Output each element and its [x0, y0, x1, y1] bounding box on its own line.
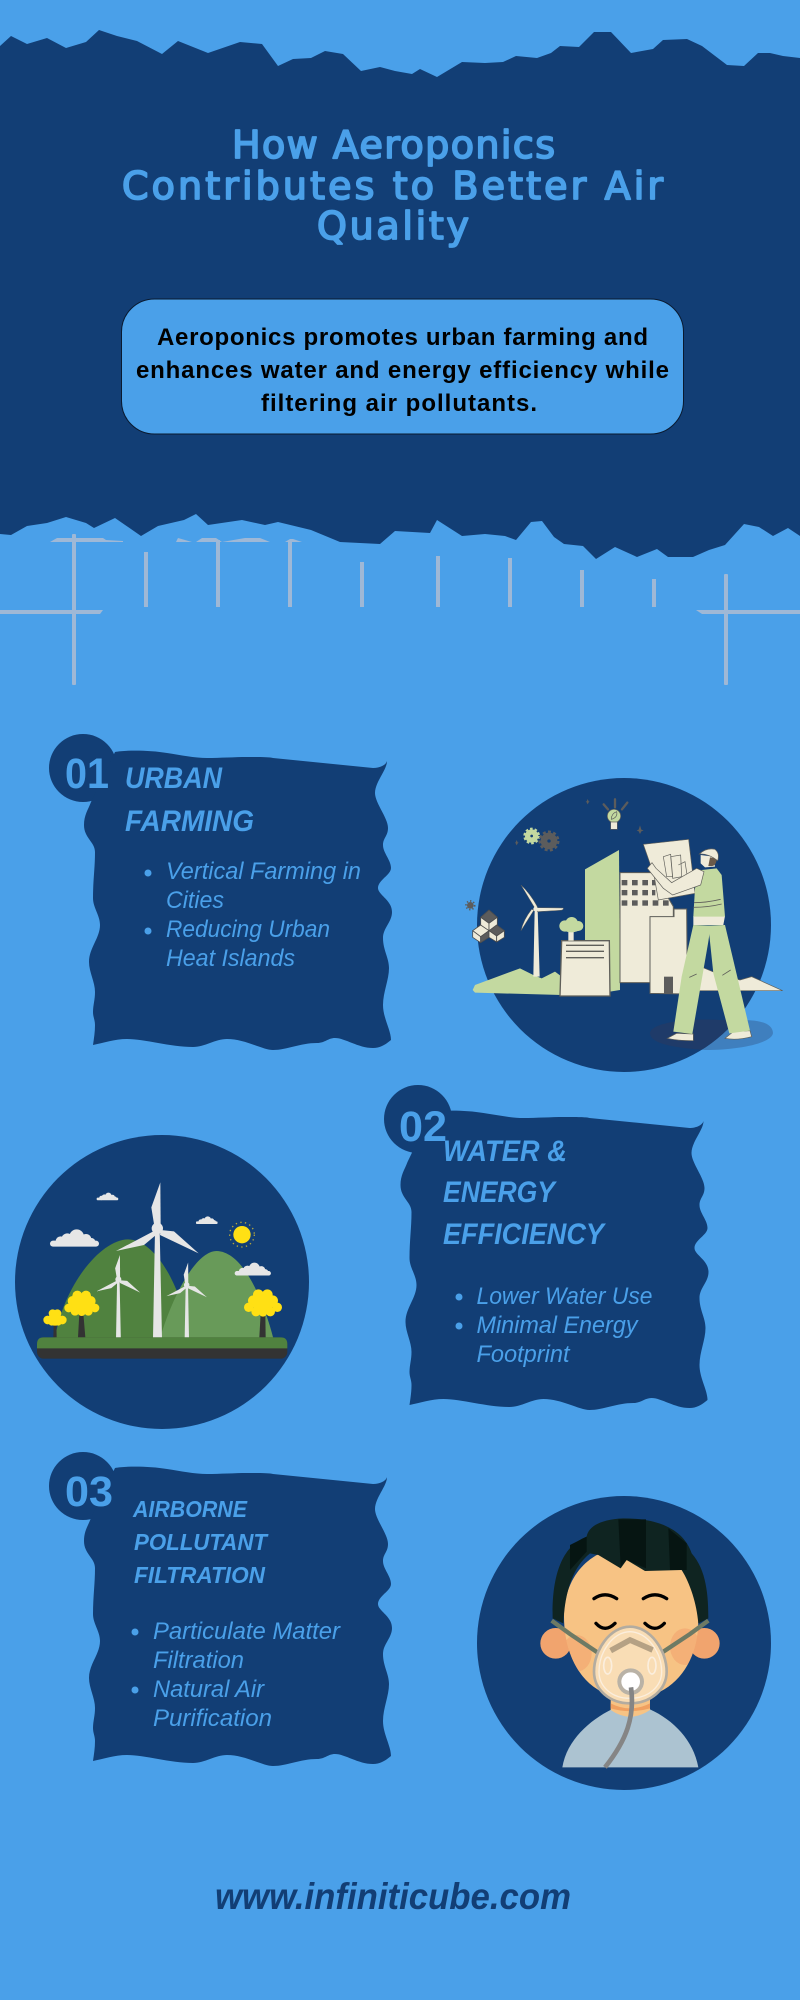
ground platform [37, 1337, 287, 1359]
arm [647, 863, 704, 895]
heading: airborne pollutant filtration: FILTRATION [134, 1562, 266, 1588]
heading: urban farming: URBAN [125, 762, 223, 795]
cubes [473, 910, 504, 943]
shirt [562, 1709, 698, 1767]
big turbine [116, 1182, 199, 1338]
intro callout: filtering air pollutants. [261, 390, 537, 417]
hair [553, 1518, 708, 1623]
list: urban farming points [144, 858, 361, 972]
sparkles [515, 799, 644, 845]
illustration: urban planner with city [466, 778, 783, 1072]
heading: urban farming: FARMING [125, 805, 254, 838]
straps [552, 1621, 708, 1656]
waist [693, 916, 725, 925]
shoes [667, 1031, 752, 1041]
head [701, 855, 715, 867]
intro callout: enhances water and energy efficiency while [136, 357, 669, 384]
list: water and energy points [456, 1283, 652, 1368]
number 02: 02 [399, 1103, 447, 1151]
title [122, 123, 663, 248]
turbine [533, 910, 540, 977]
tall green building [585, 850, 620, 992]
small turbine left [96, 1255, 140, 1338]
heading: water and energy efficiency: WATER & [443, 1135, 567, 1168]
list: filtration points: Particulate Matter [153, 1618, 341, 1645]
sun [233, 1226, 251, 1243]
list: urban farming points: Vertical Farming in [166, 858, 361, 885]
header band [0, 30, 800, 559]
illustration: wind turbines on green hills [15, 1135, 309, 1429]
list: filtration points [132, 1618, 341, 1732]
tree [568, 931, 574, 941]
plan sheet [643, 839, 695, 900]
list: filtration points: Filtration [153, 1647, 244, 1674]
list: water and energy points: Lower Water Use [476, 1283, 652, 1310]
title: Contributes to Better Air [122, 164, 663, 208]
ears [540, 1628, 571, 1659]
mask [594, 1627, 667, 1703]
tube [605, 1687, 632, 1767]
small turbine right [166, 1262, 207, 1297]
front building [650, 909, 687, 994]
grid marks below header [0, 534, 800, 685]
bulb [607, 809, 621, 823]
heading: urban farming [125, 762, 254, 838]
list: filtration points: Purification [153, 1705, 272, 1732]
title: Quality [317, 204, 469, 248]
trees [53, 1313, 266, 1337]
illustration: person with oxygen mask [477, 1496, 771, 1790]
cheeks [562, 1628, 700, 1672]
title: How Aeroponics [232, 123, 555, 167]
list: urban farming points: Cities [166, 887, 224, 914]
panel: urban farming [49, 734, 392, 1050]
windows [622, 880, 669, 906]
list: filtration points: Natural Air [153, 1676, 265, 1703]
list: water and energy points: Minimal Energy [476, 1312, 639, 1339]
intro callout: Aeroponics promotes urban farming and [157, 324, 648, 351]
list: water and energy points: Footprint [476, 1341, 571, 1368]
torso [693, 868, 725, 917]
heading: airborne pollutant filtration: POLLUTANT [134, 1529, 269, 1555]
face [564, 1547, 698, 1698]
heading: water and energy efficiency: ENERGY [443, 1176, 558, 1209]
clouds [50, 1193, 271, 1275]
panel: water and energy efficiency [384, 1085, 708, 1410]
heading: airborne pollutant filtration: AIRBORNE [132, 1496, 248, 1522]
left hill [473, 968, 562, 995]
heading: water and energy efficiency [443, 1135, 607, 1251]
gears [528, 832, 536, 840]
heading: airborne pollutant filtration [132, 1496, 269, 1588]
panel: airborne pollutant filtration [49, 1452, 392, 1766]
mid building [620, 873, 673, 983]
number 03: 03 [65, 1468, 113, 1516]
heading: water and energy efficiency: EFFICIENCY [443, 1218, 607, 1251]
hills [55, 1239, 190, 1338]
intro callout [122, 299, 684, 434]
legs [673, 925, 711, 1034]
number 01: 01 [65, 750, 109, 798]
eyebrows and eyes [594, 1595, 667, 1628]
footer url: www.infiniticube.com [215, 1876, 571, 1917]
small building [560, 941, 610, 996]
list: urban farming points: Heat Islands [166, 945, 295, 972]
list: urban farming points: Reducing Urban [166, 916, 330, 943]
neck [611, 1697, 650, 1717]
right hill [683, 965, 783, 991]
spark star [467, 902, 474, 909]
